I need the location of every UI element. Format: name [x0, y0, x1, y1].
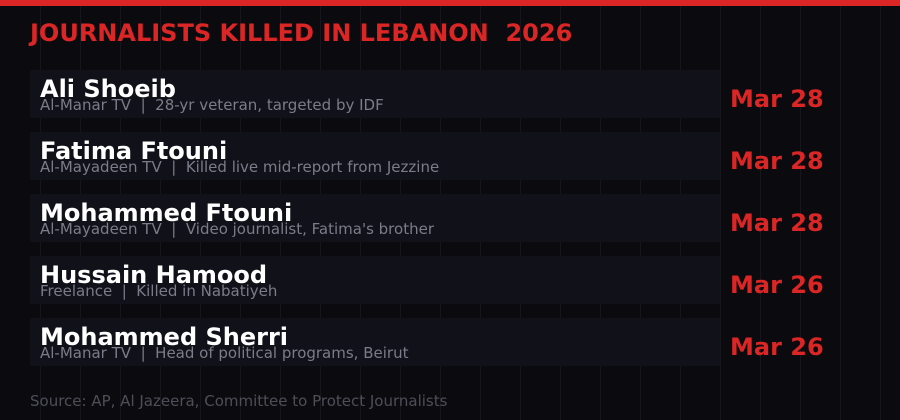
row: Ali Shoeib: Ali Shoeib: [40, 75, 176, 103]
row: Mohammed Ftouni: Mohammed Ftouni: [40, 199, 292, 227]
row: Ali Shoeib: [30, 70, 824, 118]
row: Hussain Hamood: Freelance | Killed in Nabatiyeh: [40, 282, 277, 300]
row: Hussain Hamood: [30, 256, 824, 304]
row: Mohammed Sherri: Mar 26: [730, 333, 824, 361]
row: Mohammed Ftouni: Al-Mayadeen TV | Video journalist, Fatima's brother: [40, 220, 435, 238]
row: Hussain Hamood: Hussain Hamood: [40, 261, 267, 289]
row: Ali Shoeib: Mar 28: [730, 85, 824, 113]
source note: Source: AP, Al Jazeera, Committee to Protect Journalists: [30, 392, 448, 410]
row: Mohammed Sherri: Al-Manar TV | Head of political programs, Beirut: [40, 344, 409, 362]
row: Mohammed Ftouni: Mar 28: [730, 209, 824, 237]
row: Fatima Ftouni: Al-Mayadeen TV | Killed live mid-report from Jezzine: [40, 158, 439, 176]
title: JOURNALISTS KILLED IN LEBANON 2026: [28, 19, 572, 47]
top accent bar: [0, 0, 900, 6]
row: Hussain Hamood: Mar 26: [730, 271, 824, 299]
row: Fatima Ftouni: Mar 28: [730, 147, 824, 175]
row: Ali Shoeib: Al-Manar TV | 28-yr veteran, targeted by IDF: [40, 96, 384, 114]
row: Fatima Ftouni: Fatima Ftouni: [40, 137, 227, 165]
row: Fatima Ftouni: [30, 132, 824, 180]
row: Mohammed Sherri: [30, 318, 824, 366]
row: Mohammed Sherri: Mohammed Sherri: [40, 323, 288, 351]
row: Mohammed Ftouni: [30, 194, 824, 242]
